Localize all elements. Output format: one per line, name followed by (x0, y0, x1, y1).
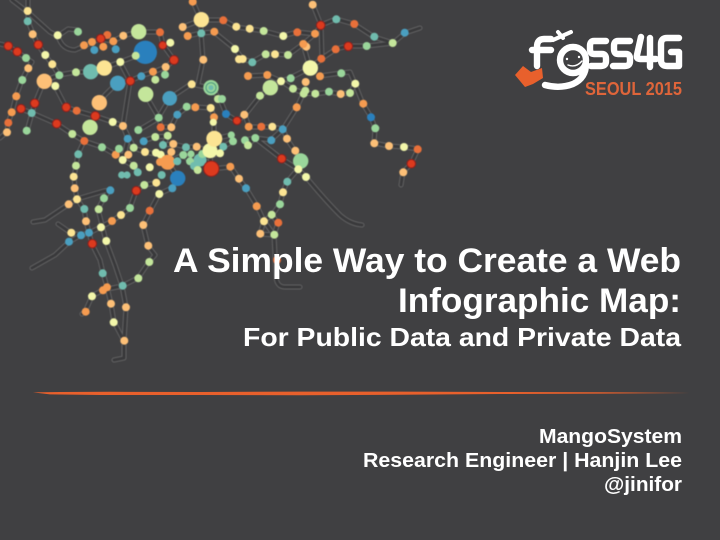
presenter info (363, 426, 682, 496)
presenter info: MangoSystem (539, 426, 682, 448)
logo eyes (566, 56, 580, 60)
title (173, 242, 682, 352)
title: A Simple Way to Create a Web (173, 242, 681, 280)
logo smile (568, 61, 582, 66)
orange brush divider (33, 392, 690, 395)
logo subtitle: SEOUL 2015 (585, 79, 682, 99)
presenter info: @jinifor (604, 474, 682, 496)
logo wordmark: FOSS4G (532, 32, 679, 87)
network map (0, 0, 422, 360)
map station nodes (3, 0, 422, 345)
presenter info: Research Engineer | Hanjin Lee (363, 450, 682, 472)
logo icon: orange book (515, 66, 543, 87)
logo: FOSS4G Seoul 2015 (515, 32, 682, 99)
title: Infographic Map: (398, 282, 681, 320)
subtitle: For Public Data and Private Data (243, 322, 682, 352)
map route lines (0, 0, 420, 360)
